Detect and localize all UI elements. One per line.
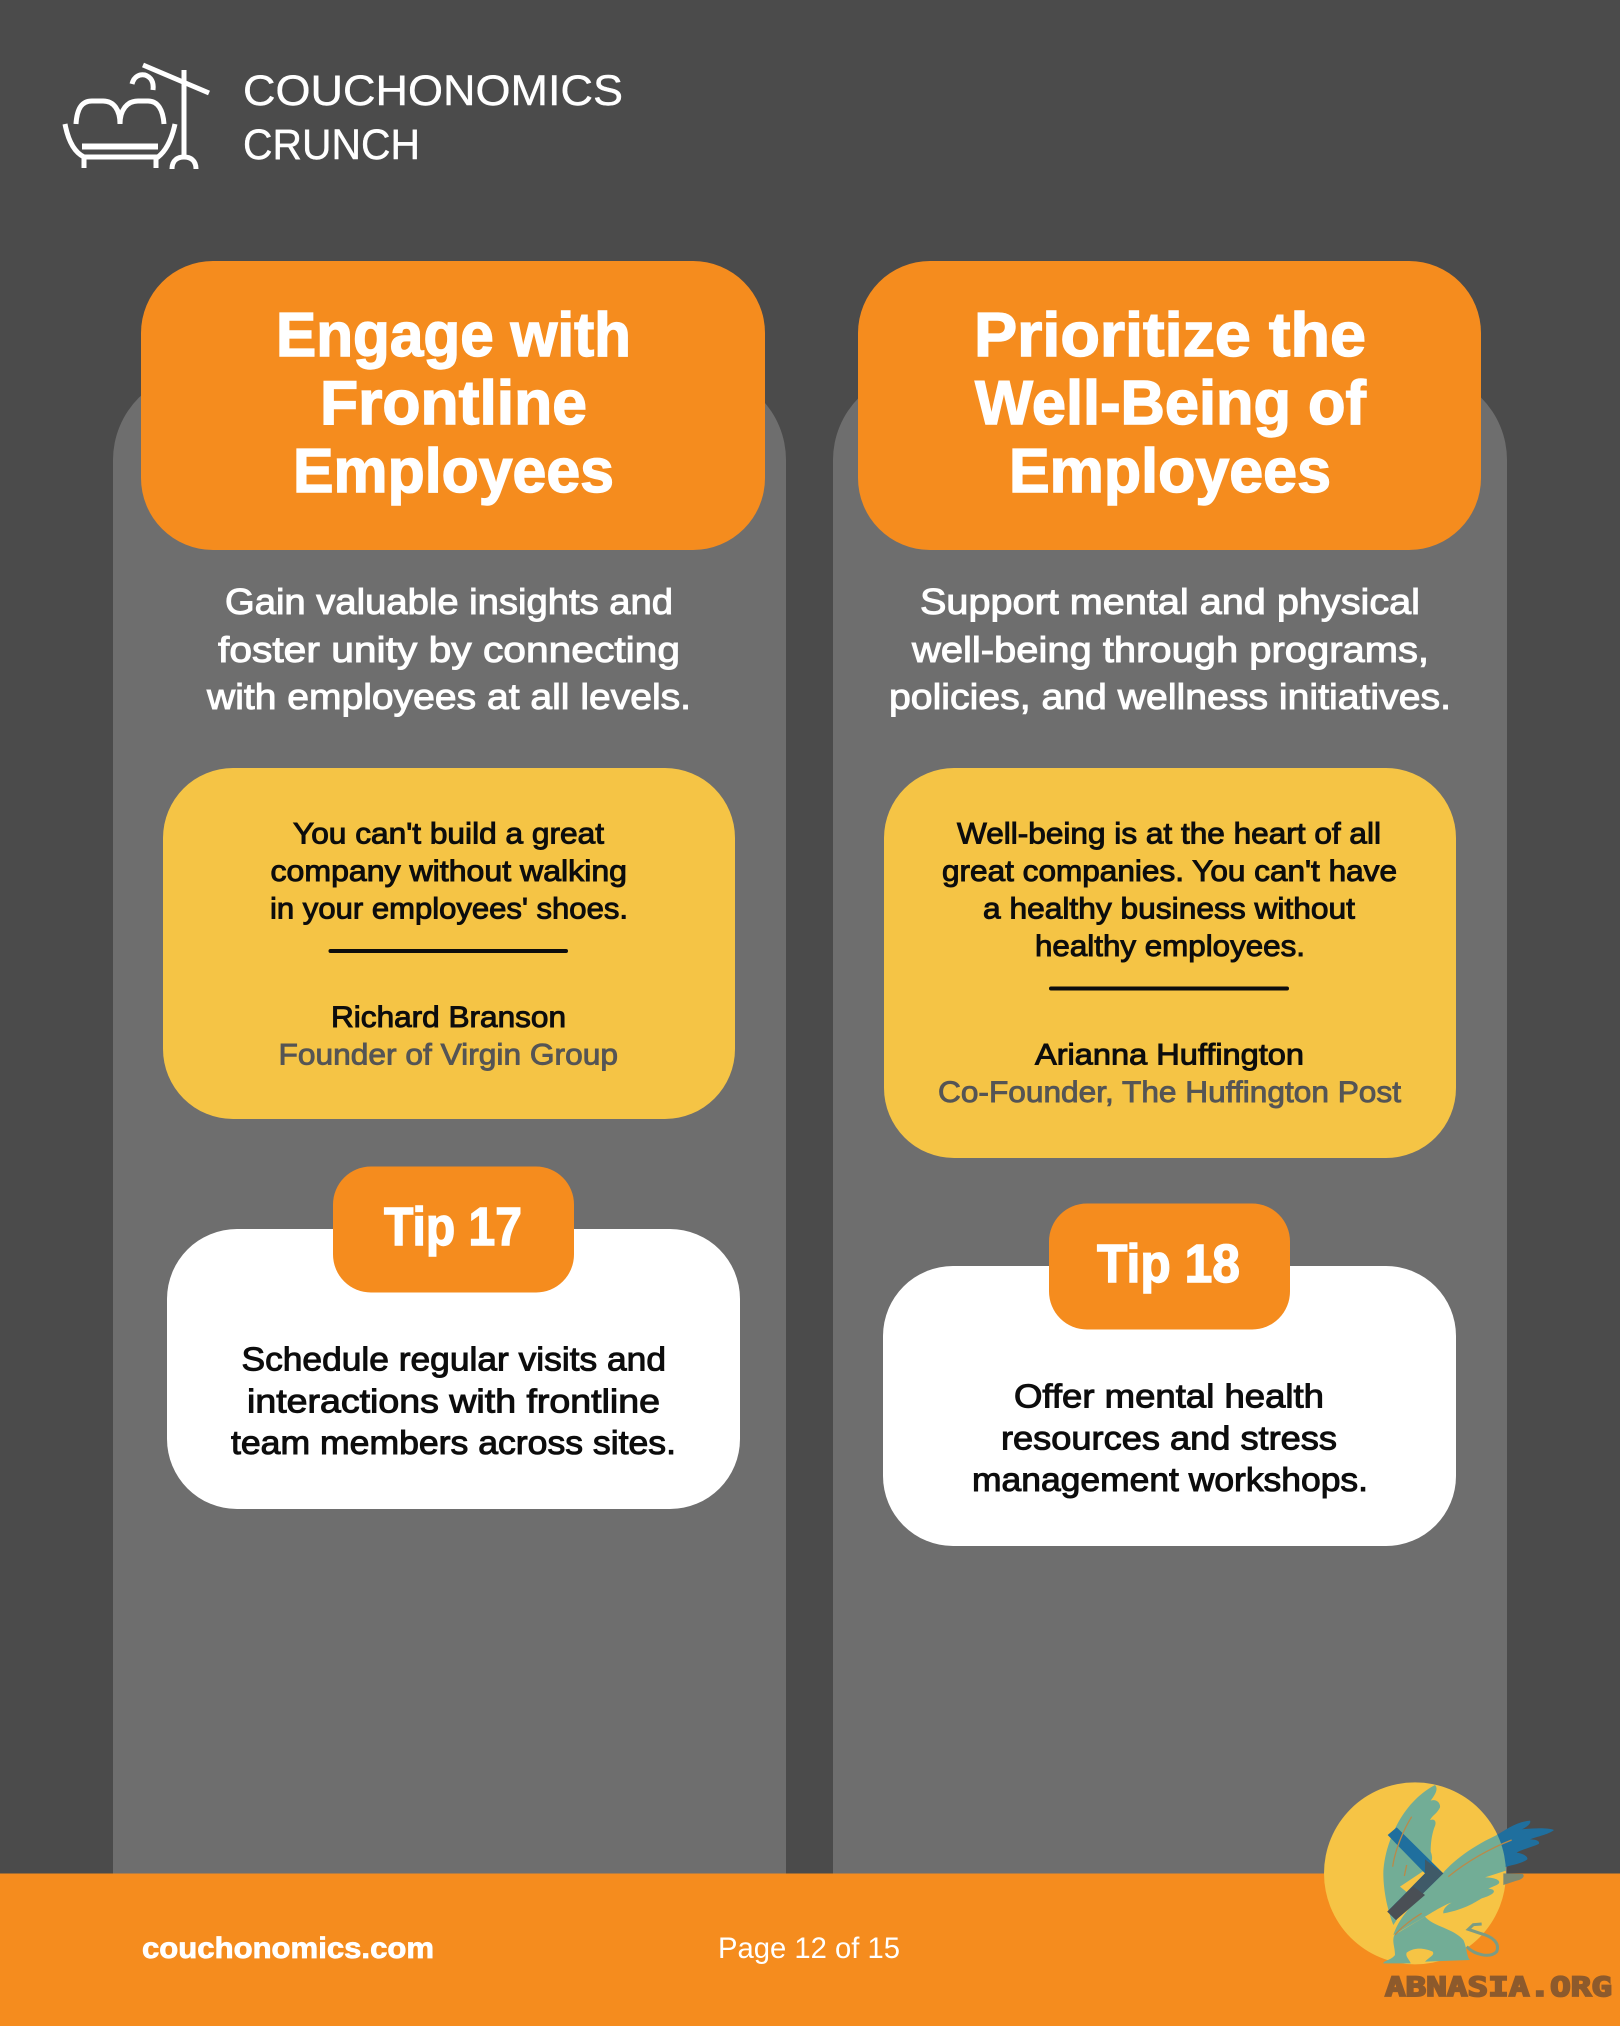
text block: left description [206,581,691,717]
callout: Arianna Huffington quote: Co-Founder, The Huffington Post [938,1076,1402,1109]
panel: tip 18: Offer mental health [1014,1378,1324,1414]
icon: griffin tail [1467,1924,1498,1955]
text block: right description [889,581,1451,717]
panel: tip 18 [883,1204,1456,1546]
icon: couch and floor lamp logo [65,65,209,169]
icon: griffin body [1383,1917,1470,1963]
text block: left description: foster unity by connecting [218,629,680,670]
text block: right description: Support mental and physical [920,581,1420,622]
callout: Richard Branson quote: company without walking [270,855,627,888]
watermark text: ABNASIA.ORG [1385,1972,1612,2003]
panel: tip 17: Schedule regular visits and [242,1340,666,1378]
panel: tip 17: Tip 17 [384,1197,522,1257]
icon: griffin wings [1383,1785,1513,1935]
heading: right column: Well-Being of [975,369,1366,438]
text block: left description: Gain valuable insights and [225,581,673,622]
panel: tip 18: resources and stress [1001,1420,1337,1456]
callout: Richard Branson quote: Richard Branson [331,1001,566,1034]
callout: Richard Branson quote: You can't build a great [293,818,605,850]
icon: griffin lower feather [1503,1873,1524,1885]
text block: left description: with employees at all levels. [206,676,691,717]
callout: Arianna Huffington quote: Arianna Huffington [1035,1038,1304,1072]
logo wordmark: COUCHONOMICS [243,67,623,115]
panel: right column background [833,372,1507,1880]
panel: tip 18: management workshops. [972,1461,1368,1498]
heading: right column [858,261,1481,550]
panel: tip 18: Tip 18 [1097,1234,1240,1294]
icon: griffin watermark emblem [1324,1782,1554,1964]
text block: right description: well-being through programs, [911,629,1429,670]
callout: Richard Branson quote: in your employees' shoes. [270,892,628,926]
heading: left column [141,261,765,550]
heading: left column: Engage with [276,301,631,370]
callout: Arianna Huffington quote [884,768,1456,1158]
footer website: couchonomics.com [142,1932,434,1965]
icon: wing quill accents [1393,1817,1512,1935]
panel: tip 17: interactions with frontline [247,1382,660,1420]
icon: griffin right wing tip [1497,1821,1554,1867]
logo wordmark: CRUNCH [243,121,420,169]
footer page number: Page 12 of 15 [718,1932,900,1965]
heading: right column: Prioritize the [974,301,1366,370]
heading: left column: Employees [293,437,614,506]
callout: Richard Branson quote [163,768,735,1119]
callout: Arianna Huffington quote: Well-being is at the heart of all [957,818,1381,850]
callout: Arianna Huffington quote: a healthy business without [983,892,1356,926]
panel: tip 17 [167,1166,740,1509]
callout: Arianna Huffington quote: healthy employees. [1035,930,1305,963]
icon: chevron mark [1387,1827,1443,1920]
heading: right column: Employees [1009,437,1331,506]
heading: left column: Frontline [320,369,587,438]
footer band [0,1874,1620,2026]
panel: tip 17: team members across sites. [231,1424,676,1461]
panel: left column background [113,372,786,1880]
callout: Richard Branson quote: Founder of Virgin Group [278,1038,618,1072]
callout: Arianna Huffington quote: great companies. You can't have [942,855,1397,888]
logo wordmark [243,67,623,169]
text block: right description: policies, and wellness initiatives. [889,676,1451,717]
